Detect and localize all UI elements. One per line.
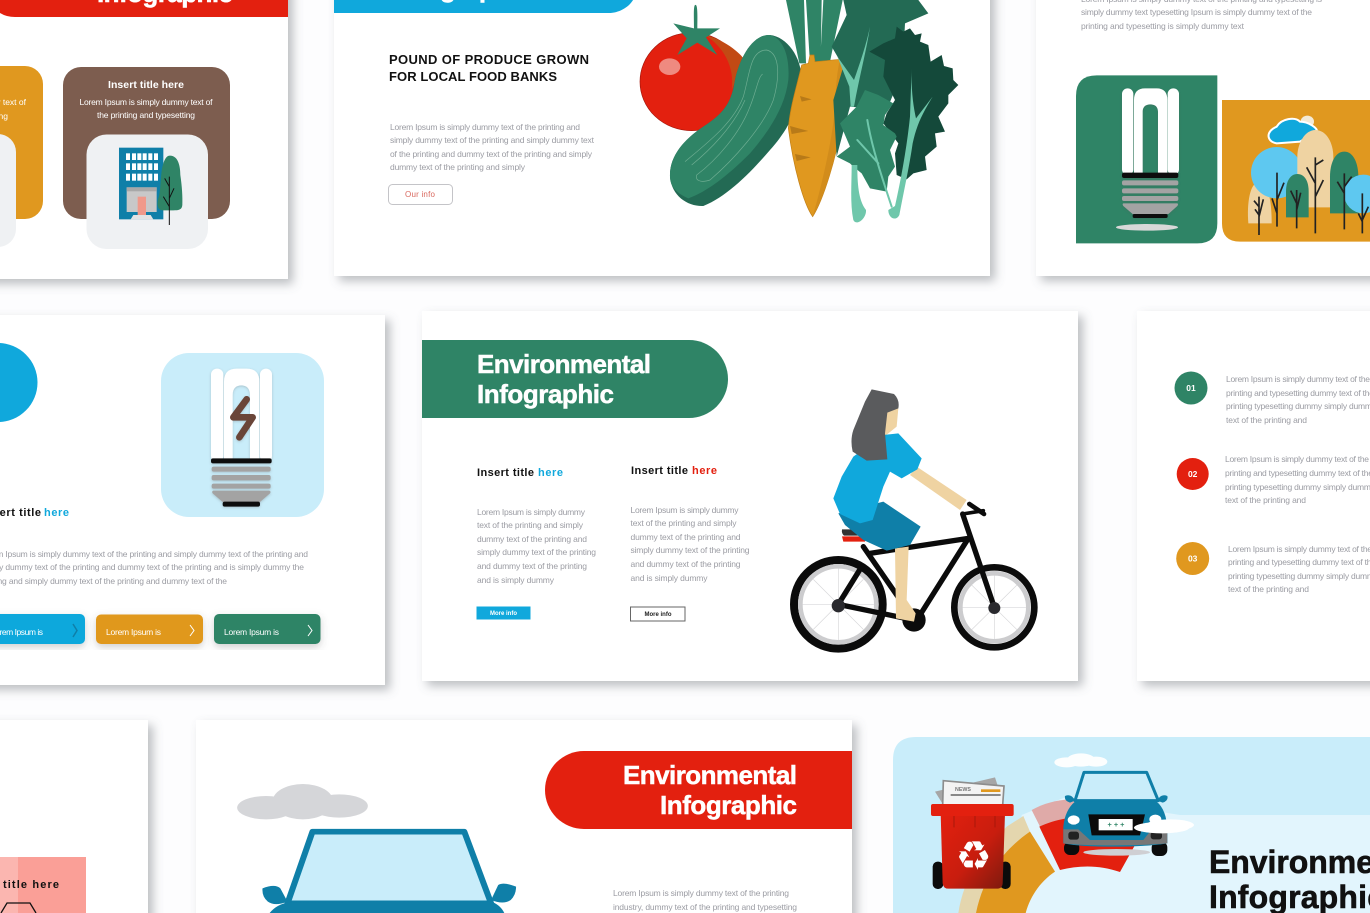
column one — [476, 467, 596, 620]
red title banner: Infographic — [660, 790, 797, 820]
bicycle — [794, 504, 1034, 649]
column two: and is simply dummy — [630, 573, 708, 583]
icon: lightning bulb on blue tile — [161, 353, 324, 517]
green title banner: Environmental — [477, 349, 651, 379]
panel: top right slide — [1036, 0, 1370, 276]
column one: simply dummy text of the printing — [477, 547, 596, 557]
blue circle — [0, 343, 38, 422]
item 01 — [1174, 372, 1370, 425]
icon: blue car with clouds: + + + — [1108, 820, 1124, 829]
column two: text of the printing and simply — [630, 518, 737, 528]
brown info card: Lorem Ipsum is simply dummy text of — [80, 97, 213, 107]
heading: FOR LOCAL FOOD BANKS — [389, 69, 557, 84]
body text: dummy text of the printing and simply — [390, 162, 526, 172]
item 03: Lorem Ipsum is simply dummy text of the — [1228, 544, 1370, 554]
red title banner — [545, 751, 852, 829]
illustration: blue car — [262, 832, 516, 913]
column two: and dummy text of the printing — [630, 559, 741, 569]
red title banner — [0, 0, 288, 17]
icon: recycling bin with newspapers — [931, 777, 1014, 889]
item 03: 03 — [1188, 554, 1198, 564]
column one: dummy text of the printing and — [477, 534, 587, 544]
body text: simply dummy text typesetting Ipsum is simply dummy text of the — [1081, 7, 1312, 17]
body text: of the printing and dummy text of the printing and simply — [390, 149, 593, 159]
item 01: 01 — [1186, 383, 1196, 393]
subtitle: here — [44, 507, 69, 519]
green kale leaf — [837, 90, 897, 222]
red title banner: Environmental — [623, 760, 797, 790]
title — [1209, 844, 1370, 913]
panel: middle left bulb slide — [0, 315, 385, 685]
body text: industry, dummy text of the printing and typesetting — [613, 902, 797, 912]
button: orange: Lorem Ipsum is — [106, 627, 161, 637]
icon: grey cloud — [237, 784, 368, 819]
column one: and dummy text of the printing — [477, 561, 587, 571]
item 03: text of the printing and — [1228, 584, 1309, 594]
item 02: printing and typesetting dummy text of the — [1225, 468, 1370, 478]
brown info card: Insert title here — [108, 79, 184, 91]
item 02: Lorem Ipsum is simply dummy text of the — [1225, 454, 1369, 464]
dark kale leaf — [869, 27, 958, 219]
body text: printing and typesetting is simply dummy text — [1081, 21, 1245, 31]
title: Environme — [1209, 844, 1370, 880]
column one: Insert title — [477, 467, 534, 479]
column one: text of the printing and simply — [477, 520, 584, 530]
orange info card — [0, 66, 43, 247]
panel: bottom left slide — [0, 720, 148, 913]
panel: top left slide — [0, 0, 288, 279]
column one: More info — [490, 611, 517, 617]
brown info card: the printing and typesetting — [97, 110, 195, 120]
icon: recycling bin with newspapers: ♻ — [956, 833, 992, 879]
pink card — [0, 857, 86, 913]
green title banner: Infographic — [477, 379, 614, 409]
blue title banner — [334, 0, 636, 13]
panel: bottom right recycling slide — [893, 737, 1370, 913]
item 02: 02 — [1188, 469, 1198, 479]
item 01: printing and typesetting dummy text of the — [1226, 388, 1370, 398]
woman — [833, 389, 967, 622]
panel: middle right numbered list — [1137, 311, 1370, 681]
button: our info: Our info — [405, 190, 436, 199]
body text — [390, 122, 595, 172]
back kale leaf — [832, 0, 928, 157]
body text — [1081, 0, 1322, 31]
cucumber — [670, 35, 802, 206]
carrot — [786, 0, 844, 217]
icon: recycling bin with newspapers: NEWS — [955, 787, 971, 793]
column two: here — [692, 465, 717, 477]
green title banner — [422, 340, 728, 418]
body text: Lorem Ipsum is simply dummy text of the printing — [613, 888, 789, 898]
column one: here — [538, 467, 563, 479]
column two: dummy text of the printing and — [630, 532, 741, 542]
icon: office building and tree — [119, 148, 182, 225]
arc segments — [958, 797, 1180, 913]
illustration: vegetables — [640, 0, 958, 222]
heading: POUND OF PRODUCE GROWN — [389, 52, 589, 67]
column two: simply dummy text of the printing — [630, 545, 750, 555]
column one: Lorem Ipsum is simply dummy — [477, 507, 586, 517]
subtitle — [0, 507, 69, 519]
illustration: woman on bicycle — [794, 389, 1034, 649]
icon: blue car with clouds — [1054, 753, 1194, 856]
body text — [0, 549, 308, 586]
icon: forest on orange tile — [1222, 100, 1370, 242]
button: blue — [0, 614, 85, 644]
button: green — [214, 614, 320, 644]
body text: Lorem Ipsum is simply dummy text of the printing and — [390, 122, 580, 132]
item 01: text of the printing and — [1226, 415, 1307, 425]
brown info card — [63, 67, 230, 249]
item 03 — [1176, 542, 1370, 594]
heading — [389, 52, 589, 84]
button: our info — [388, 184, 452, 204]
body text: simply dummy text of the printing and simply dummy text — [390, 135, 595, 145]
column two: More info — [644, 612, 672, 618]
column two: Lorem Ipsum is simply dummy — [630, 505, 739, 515]
body text — [613, 888, 797, 912]
item 02: text of the printing and — [1225, 495, 1306, 505]
item 01: Lorem Ipsum is simply dummy text of the — [1226, 374, 1370, 384]
column two — [630, 465, 750, 621]
column one: and is simply dummy — [477, 575, 555, 585]
tomato — [640, 5, 744, 131]
icon: bulb on green tile — [1076, 75, 1217, 243]
button: green: Lorem Ipsum is — [224, 627, 279, 637]
panel: top centre produce slide — [334, 0, 990, 276]
panel: centre cycling slide — [422, 311, 1078, 681]
button: orange — [96, 614, 203, 644]
column two: Insert title — [631, 465, 688, 477]
panel: bottom centre car slide — [196, 720, 852, 913]
item 02 — [1177, 454, 1370, 505]
